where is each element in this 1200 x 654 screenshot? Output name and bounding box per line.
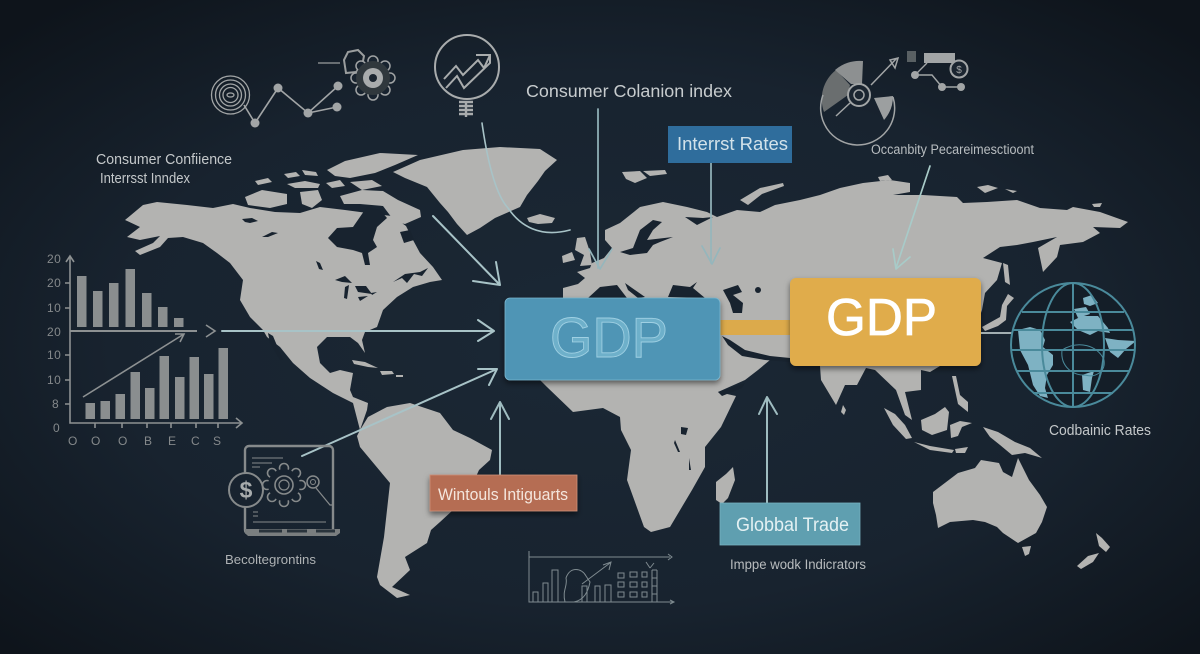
map: Southeast Asia islands <box>841 376 1042 458</box>
icon: gears <box>318 50 395 100</box>
box: Interest Rates: Interrst Rates <box>677 134 788 154</box>
box: Global Trade <box>720 503 860 545</box>
chart: axis labels: 20 <box>47 325 61 339</box>
map: inland seas <box>242 207 790 470</box>
arrow: global trade up <box>759 397 777 503</box>
chart: upper bars <box>77 269 184 327</box>
arrows into GDP <box>222 109 930 503</box>
chart: double bar chart <box>47 252 242 448</box>
arrow: interest rates down <box>702 163 720 264</box>
chart: axis labels: B <box>144 434 153 448</box>
map: Greenland <box>393 147 557 235</box>
box: red label: Wintouls Intiguarts <box>438 486 568 504</box>
label: consumer confidence: Interrsst Inndex <box>100 171 191 187</box>
icon: gauge and dollar network <box>821 51 968 145</box>
map: Iceland <box>527 214 555 224</box>
chart axes <box>65 256 242 428</box>
icon: small line chart <box>529 551 674 604</box>
blue GDP box: GDP <box>550 306 668 370</box>
icon: spiral and network nodes <box>212 76 342 128</box>
chart: axis labels: 8 <box>52 397 59 411</box>
arrow: gold box to globe drawn later <box>981 332 1073 334</box>
map: South America <box>357 403 492 598</box>
map: New Zealand <box>1077 533 1110 569</box>
world map <box>125 147 1128 598</box>
icon: gauge and dollar network: $ <box>956 65 962 76</box>
chart: axis labels: E <box>168 434 177 448</box>
label: bottom left: Becoltegrontins <box>225 552 316 567</box>
chart: axis labels: 0 <box>53 421 60 435</box>
chart: axis labels: 10 <box>47 373 61 387</box>
label: indicators: Imppe wodk Indicrators <box>730 557 866 572</box>
box: Interest Rates <box>668 126 792 163</box>
blue GDP box <box>505 298 720 380</box>
icon: device with gear and dollar: $ <box>240 477 253 503</box>
chart: axis labels: 20 <box>47 252 61 266</box>
map: Eurasia and Africa <box>535 180 1128 532</box>
label: consumer index: Consumer Colanion index <box>526 81 732 101</box>
chart: axis labels: O <box>118 434 128 448</box>
chart: axis labels: C <box>191 434 200 448</box>
chart: axis labels: O <box>91 434 101 448</box>
chart: axis labels: 10 <box>47 348 61 362</box>
label: rates: Codbainic Rates <box>1049 423 1151 439</box>
map: Caribbean islands <box>352 360 403 377</box>
chart: axis labels <box>47 252 222 448</box>
icon: globe <box>1011 283 1136 407</box>
map: Australia <box>933 458 1047 543</box>
label: occupancy: Occanbity Pecareimesctioont <box>871 142 1034 157</box>
arrow: Consumer index down <box>589 109 612 269</box>
icon: lightbulb with growth arrow <box>435 35 499 117</box>
arrow: red box up <box>491 402 509 476</box>
chart: axis labels: 10 <box>47 301 61 315</box>
map: Madagascar <box>716 467 735 504</box>
arrow: Greenland to GDP <box>433 216 500 285</box>
map: North America <box>125 153 442 430</box>
map: Japan <box>982 294 1014 331</box>
arrow: chart to GDP <box>222 320 494 341</box>
box: red label <box>430 475 577 511</box>
label: consumer confidence <box>96 152 232 187</box>
arrow: occupancy label down <box>893 166 930 269</box>
connector between GDP boxes <box>718 320 792 335</box>
chart: axis labels: 20 <box>47 276 61 290</box>
chart: lower bars <box>86 348 228 419</box>
label: consumer confidence: Consumer Confiience <box>96 152 232 168</box>
map: Tasmania <box>1022 546 1031 556</box>
arrow: curved line from bulb <box>482 123 570 233</box>
icon: device with gear and dollar <box>229 446 340 536</box>
gold GDP box: GDP <box>826 289 937 347</box>
map: European and Arctic islands <box>562 170 1102 285</box>
chart: axis labels: O <box>68 434 78 448</box>
arrow: device to GDP <box>302 369 497 456</box>
chart: axis labels: S <box>213 434 222 448</box>
box: Global Trade: Globbal Trade <box>736 515 849 536</box>
gold GDP box <box>790 278 981 366</box>
